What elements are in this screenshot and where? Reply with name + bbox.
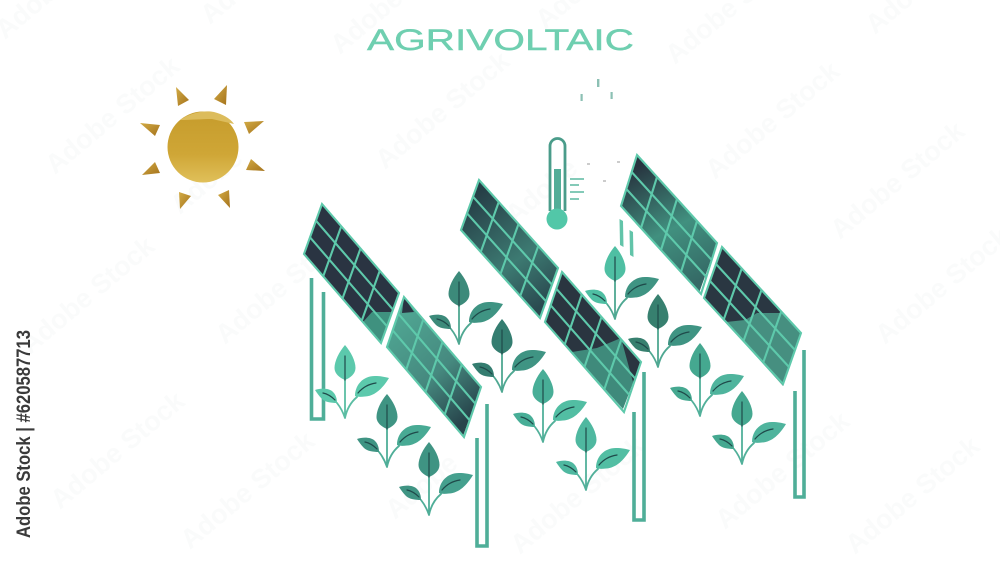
sun highlight bbox=[180, 111, 234, 124]
faint background watermark: Adobe Stock bbox=[40, 50, 186, 180]
solar panel: row 1 upper bbox=[304, 204, 399, 343]
plant 10 bbox=[670, 343, 744, 416]
solar panel: row 3 upper bbox=[621, 155, 717, 294]
heat dashes bbox=[580, 79, 620, 182]
sun disc bbox=[168, 112, 238, 182]
faint background watermark: Adobe Stock bbox=[710, 405, 856, 535]
solar panel: row 2 lower bbox=[545, 272, 641, 412]
thermometer ticks bbox=[570, 179, 584, 199]
faint background watermark: Adobe Stock bbox=[175, 425, 321, 555]
plant 4 bbox=[429, 271, 503, 344]
faint background watermark: Adobe Stock bbox=[370, 45, 516, 175]
plant 11 bbox=[712, 391, 786, 464]
short bars near third panel bbox=[620, 219, 634, 257]
faint background watermark: Adobe Stock bbox=[15, 230, 161, 360]
solar panel: row 3 lower bbox=[704, 247, 801, 386]
plant 1 bbox=[315, 345, 389, 418]
plant 3 bbox=[399, 442, 473, 515]
faint background watermark: Adobe Stock bbox=[45, 385, 191, 515]
plant 7 bbox=[628, 294, 702, 367]
faint background watermark: Adobe bbox=[380, 448, 463, 525]
faint background watermark: Adobe Stock bbox=[825, 115, 971, 245]
icon: thermometer bbox=[546, 138, 584, 230]
panel support: row 1 front bbox=[477, 404, 487, 546]
plant 8 bbox=[513, 369, 587, 442]
stock id text: Adobe Stock | #620587713 bbox=[14, 330, 35, 538]
solar panel: row 1 lower bbox=[387, 297, 481, 437]
panel support: row 2 bbox=[634, 372, 644, 520]
faint background watermark: Adobe Stock bbox=[505, 430, 651, 560]
panel support: row 1 rear bbox=[312, 278, 324, 419]
icon: sun bbox=[140, 85, 265, 209]
panel support: row 3 bbox=[795, 350, 804, 497]
faint background watermark: Adobe Stock bbox=[840, 430, 986, 560]
thermometer bulb bbox=[546, 208, 568, 230]
faint background watermark: Adobe bbox=[165, 143, 248, 220]
plant 6 bbox=[585, 246, 659, 319]
plant 2 bbox=[357, 394, 431, 467]
thermometer tube bbox=[550, 138, 565, 211]
solar panel: row 2 upper bbox=[461, 180, 558, 318]
plant 5 bbox=[472, 319, 546, 392]
faint background watermark: Adobe bbox=[500, 153, 583, 230]
faint background watermark: Adobe Stock bbox=[210, 220, 356, 350]
thermometer mercury bbox=[554, 169, 561, 215]
title: AGRIVOLTAIC bbox=[367, 24, 634, 57]
plant 9 bbox=[556, 417, 630, 490]
faint background watermark: Adobe Stock bbox=[700, 55, 846, 185]
sun rays bbox=[140, 85, 265, 209]
